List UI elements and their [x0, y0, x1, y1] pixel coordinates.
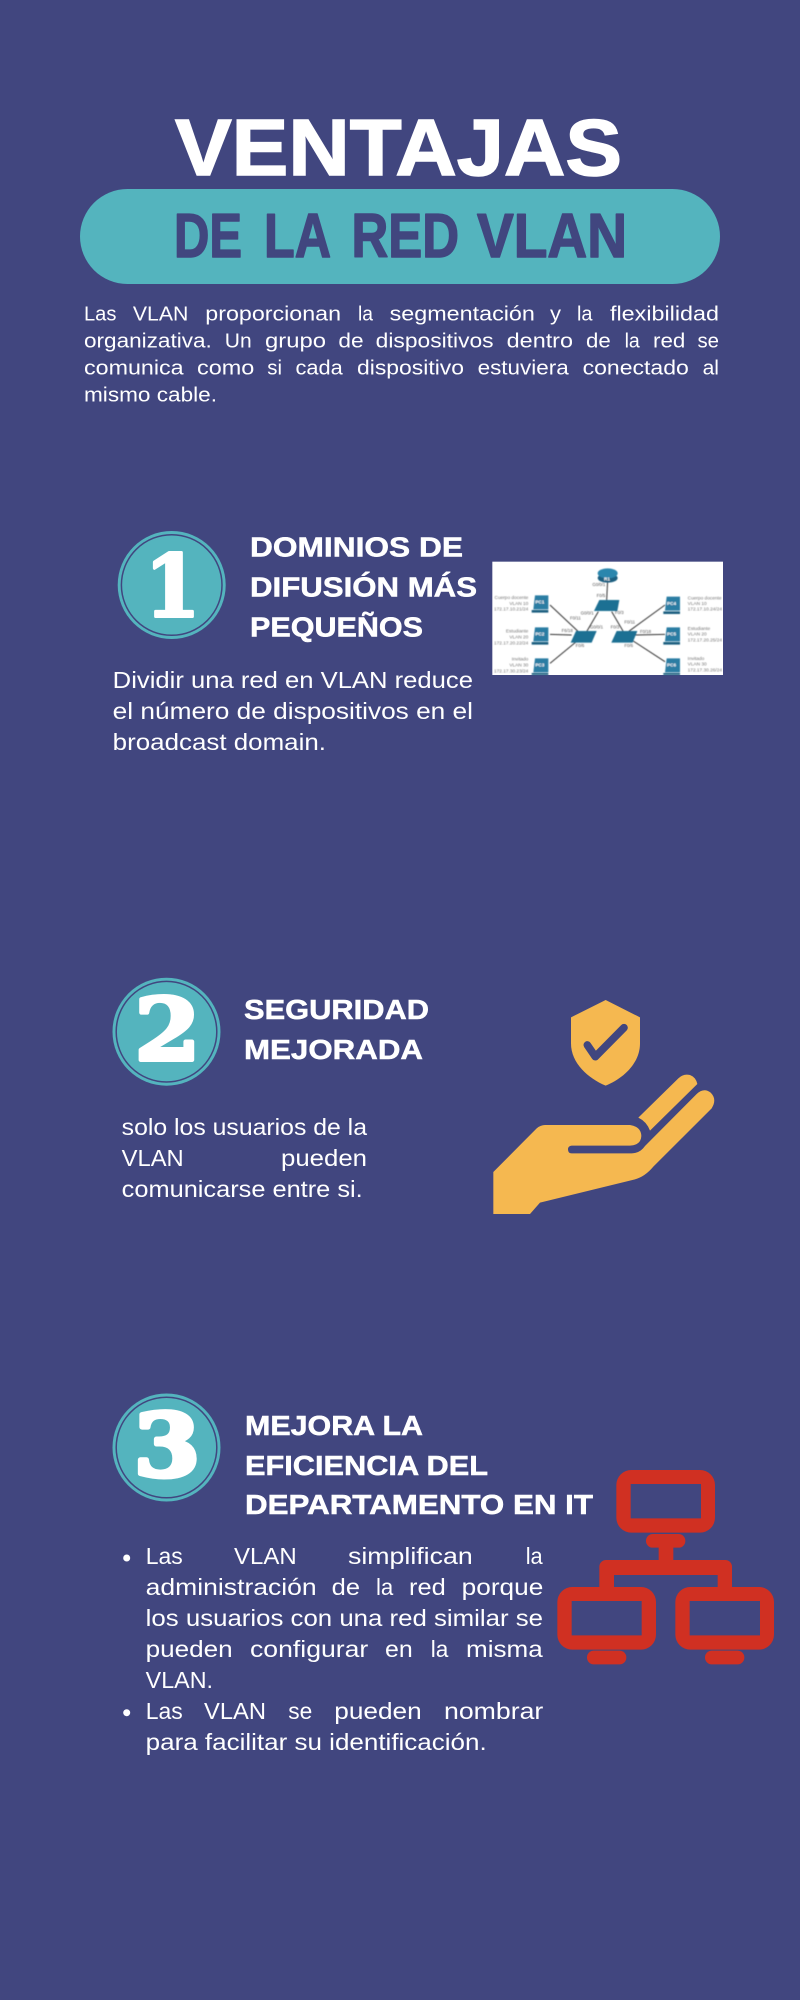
network diagram image: PC5 — [667, 632, 676, 637]
bullet list: Las — [146, 1698, 183, 1724]
network diagram image: VLAN 30 — [688, 662, 707, 668]
subtitle text: DE — [174, 202, 242, 271]
icon: hand holding shield — [493, 1000, 714, 1214]
intro paragraph: cada — [296, 358, 344, 380]
network diagram image: VLAN 20 — [509, 634, 529, 640]
network diagram image: VLAN 30 — [509, 662, 529, 668]
intro paragraph — [84, 304, 719, 407]
network diagram image: VLAN 20 — [688, 632, 707, 638]
panel: section 3 — [112, 1394, 774, 1755]
subtitle text — [174, 202, 627, 271]
network diagram image: F0/18 — [640, 629, 652, 634]
subtitle pill — [80, 189, 720, 284]
bullet list: VLAN. — [146, 1667, 213, 1693]
intro paragraph: la — [358, 304, 374, 326]
intro paragraph: la — [577, 304, 593, 326]
network diagram image: Estudiante — [688, 626, 710, 632]
network diagram image: F0/11 — [624, 620, 636, 625]
intro paragraph: conectado — [583, 358, 689, 380]
bullet list: VLAN — [204, 1698, 266, 1724]
intro paragraph: proporcionan — [205, 304, 341, 326]
heading 3: DEPARTAMENTO EN IT — [245, 1489, 593, 1520]
intro paragraph: comunica — [84, 358, 185, 380]
bullet list: se — [288, 1698, 312, 1724]
intro paragraph: flexibilidad — [610, 304, 719, 326]
icon: hand — [493, 1075, 714, 1214]
network diagram image: PC6 — [667, 663, 676, 668]
network diagram image: 172.17.10.21/24 — [494, 607, 529, 613]
panel: section 2 — [112, 978, 714, 1214]
intro paragraph: se — [698, 331, 719, 353]
network diagram image: VLAN 10 — [688, 601, 707, 607]
network diagram image: F0/3 — [611, 624, 620, 629]
heading 1: DIFUSIÓN MÁS — [250, 572, 477, 603]
bullet list: en — [385, 1636, 413, 1662]
text block 1: el número de dispositivos en el — [113, 698, 473, 724]
bullet list: porque — [462, 1574, 543, 1600]
bullet list — [123, 1543, 544, 1755]
network diagram image: F0/6 — [624, 643, 634, 648]
heading 3 — [245, 1410, 593, 1520]
network diagram image: Estudiante — [506, 628, 529, 634]
network diagram image: VLAN 10 — [509, 601, 529, 607]
number badge 2 — [112, 978, 220, 1086]
intro paragraph: grupo — [265, 331, 326, 353]
network diagram image — [492, 562, 723, 675]
intro paragraph: al — [703, 358, 719, 380]
intro paragraph: de — [586, 331, 611, 353]
intro paragraph: estuviera — [478, 358, 570, 380]
number badge 1 — [118, 531, 226, 639]
network diagram image: F0/6 — [576, 643, 585, 648]
bullet list: VLAN — [234, 1543, 297, 1569]
intro paragraph: VLAN — [133, 304, 188, 326]
bullet list: pueden — [146, 1636, 233, 1662]
intro paragraph: organizativa. — [84, 331, 212, 353]
intro paragraph: como — [197, 358, 254, 380]
network diagram image: F0/5 — [597, 593, 606, 598]
heading 1: DOMINIOS DE — [250, 532, 463, 563]
heading 1: PEQUEÑOS — [250, 612, 423, 643]
intro paragraph: la — [625, 331, 641, 353]
title: VENTAJAS: VENTAJAS — [175, 103, 622, 192]
text block 2: VLAN — [122, 1145, 184, 1171]
network diagram image: 172.17.20.25/24 — [688, 638, 722, 644]
network diagram image: PC4 — [667, 601, 676, 606]
network diagram image: G0/0/1 — [590, 624, 604, 629]
heading 2: MEJORADA — [244, 1034, 423, 1065]
intro paragraph: si — [267, 358, 282, 380]
number badge 1: 1 — [144, 536, 200, 638]
bullet list: misma — [466, 1636, 543, 1662]
network diagram image: 172.17.20.22/24 — [494, 640, 529, 646]
intro paragraph: red — [653, 331, 685, 353]
heading 3: EFICIENCIA DEL — [245, 1450, 488, 1481]
intro paragraph: de — [338, 331, 364, 353]
text block 1 — [113, 667, 473, 755]
bullet list: la — [376, 1574, 393, 1600]
network diagram image: PC1 — [535, 600, 545, 605]
intro paragraph: dispositivo — [357, 358, 464, 380]
subtitle text: LA — [264, 202, 331, 271]
intro paragraph: dentro — [507, 331, 573, 353]
network diagram image: F6/18 — [562, 628, 573, 633]
network diagram image: G0/0/1 — [592, 582, 606, 587]
bullet list: configurar — [250, 1636, 369, 1662]
number badge 3: 3 — [134, 1396, 200, 1497]
intro paragraph: y — [550, 304, 561, 326]
icon: network of monitors — [557, 1470, 774, 1664]
network diagram image: Cuerpo docente — [495, 595, 529, 601]
network diagram image: F0/3 — [615, 610, 624, 615]
number badge 3 — [112, 1394, 220, 1502]
icon: shield with check — [571, 1000, 640, 1086]
network diagram image: Invitado — [688, 656, 705, 662]
text block 2: comunicarse entre si. — [122, 1176, 363, 1202]
text block 2: pueden — [281, 1145, 367, 1171]
bullet list: para facilitar su identificación. — [146, 1729, 487, 1755]
number badge 2: 2 — [134, 980, 200, 1081]
heading 1 — [250, 532, 477, 643]
network diagram image: Invitado — [512, 657, 529, 663]
bullet list: Las — [146, 1543, 183, 1569]
bullet list: nombrar — [444, 1698, 544, 1724]
subtitle text: RED — [352, 202, 459, 271]
bullet list: administración — [146, 1574, 317, 1600]
bullet list: la — [431, 1636, 449, 1662]
network diagram image: PC3 — [535, 663, 545, 668]
text block 1: broadcast domain. — [113, 729, 326, 755]
heading 2 — [244, 994, 429, 1065]
heading 2: SEGURIDAD — [244, 994, 429, 1025]
heading 3: MEJORA LA — [245, 1410, 423, 1441]
bullet list: de — [332, 1574, 360, 1600]
network diagram image: 172.17.30.26/24 — [688, 668, 722, 674]
bullet list: los usuarios con una red similar se — [146, 1605, 543, 1631]
panel: section 1 — [113, 531, 723, 755]
intro paragraph: mismo cable. — [84, 385, 217, 407]
text block 2 — [122, 1114, 367, 1202]
intro paragraph: segmentación — [390, 304, 535, 326]
bullet list: pueden — [334, 1698, 422, 1724]
text block 1: Dividir una red en VLAN reduce — [113, 667, 473, 693]
network diagram image: F0/11 — [570, 616, 581, 621]
subtitle text: VLAN — [477, 202, 627, 271]
bullet list: simplifican — [348, 1543, 473, 1569]
network diagram image: Cuerpo docente — [688, 595, 722, 601]
bullet list: red — [409, 1574, 446, 1600]
network diagram image: 172.17.30.23/24 — [494, 668, 529, 674]
network diagram image: G0/0/1 — [581, 611, 594, 616]
network diagram image: R1 — [604, 577, 610, 582]
intro paragraph: dispositivos — [376, 331, 494, 353]
network diagram image: 172.17.10.24/24 — [688, 607, 722, 613]
bullet list: la — [526, 1543, 543, 1569]
text block 2: solo los usuarios de la — [122, 1114, 367, 1140]
intro paragraph: Un — [225, 331, 252, 353]
intro paragraph: Las — [84, 304, 116, 326]
network diagram image: PC2 — [535, 632, 545, 637]
